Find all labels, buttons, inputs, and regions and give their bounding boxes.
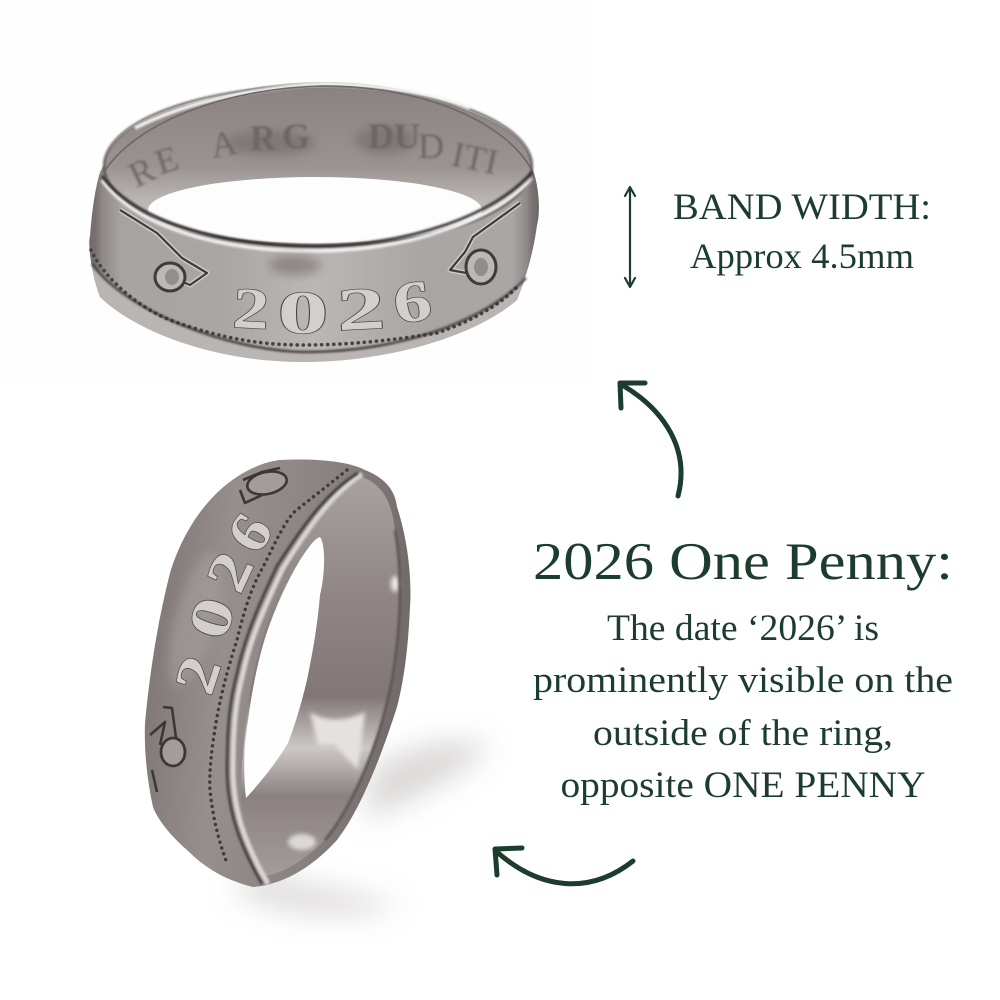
ring 1 right motif (450, 203, 520, 284)
ring 2 date: 0 (175, 589, 248, 646)
ring 1 inner hole (148, 177, 482, 243)
heading: 2026 One Penny: 2026 One Penny: (533, 533, 953, 591)
ring 2 date: 2 (193, 542, 266, 601)
ring 2 light patch (158, 547, 232, 693)
ring 1 inner lettering: R (250, 118, 277, 158)
ring 1 outer body (89, 82, 539, 362)
ring 2 inner hole (244, 537, 324, 798)
ring 1 inner lettering: E (150, 138, 183, 183)
ring 1 side shade and lower lip (85, 175, 544, 370)
ring 2 outer body (145, 459, 410, 887)
ring 1 beaded edge (91, 250, 517, 345)
ring 2 beaded edge (210, 470, 347, 863)
ring 2 inner wall (241, 476, 400, 876)
ring 1 date: 2 (231, 276, 271, 342)
ring photo: top view with 2026 (85, 82, 544, 370)
ring 1 left motif (120, 210, 207, 291)
description text block: prominently visible on the (533, 660, 953, 701)
ring 1 date: 6 (389, 267, 435, 336)
ring 1 date (231, 267, 435, 347)
ring 1 inner lettering (122, 116, 502, 195)
ring 2 lower motif (150, 707, 185, 792)
ring 2 date (162, 503, 286, 701)
description text block: The date ‘2026’ is (607, 608, 879, 649)
ring 1 inner dark patches (225, 126, 415, 155)
ring 1 date: 0 (278, 280, 328, 347)
ring 1 top rim highlights (104, 86, 532, 246)
arrow: band width double-headed (625, 187, 635, 287)
ring 2 cast shadow (230, 741, 490, 916)
ring 1 inner lettering: D (418, 126, 444, 166)
ring 2 date: 6 (215, 503, 286, 564)
ring 1 inner lettering: R (122, 149, 161, 195)
ring 1 shaded centre reflection (269, 255, 321, 275)
description text block: outside of the ring, (593, 713, 893, 754)
ring 1 date: 2 (335, 275, 387, 344)
ring 2 inner rim outline (325, 530, 400, 840)
arrow: curved pointing to top ring (620, 383, 681, 496)
ring 2 rim edge (233, 474, 362, 884)
ring 1 inner lettering: G (282, 116, 310, 156)
ring 1 front lip (102, 178, 532, 251)
band width text block (673, 187, 931, 276)
ring 1 inner wall (104, 88, 532, 246)
photo background: top ring (0, 0, 590, 385)
band width label: BAND WIDTH: (673, 187, 931, 228)
ring 1 inner lettering: ITI (448, 134, 502, 182)
arrow: curved pointing to lower ring (495, 848, 633, 884)
ring 1 inner lettering: DU (368, 116, 420, 156)
band width value: Approx 4.5mm (690, 236, 914, 276)
ring 2 upper motif (240, 468, 289, 503)
ring 2 inner reflections (288, 576, 399, 850)
description text block: opposite ONE PENNY (560, 765, 926, 806)
description text block (533, 608, 953, 806)
ring photo: angled view with 2026 (145, 459, 490, 916)
ring 2 date: 2 (162, 648, 234, 701)
ring 1 inner lettering: A (207, 122, 240, 166)
